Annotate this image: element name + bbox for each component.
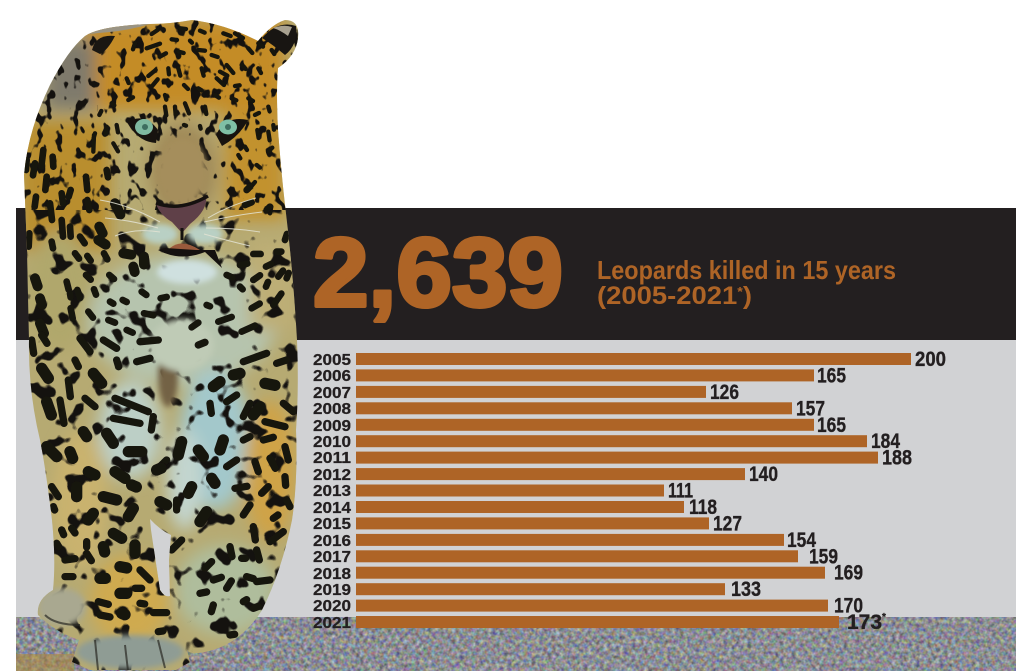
- row 2005: 200: [915, 348, 946, 371]
- row 2017: [313, 545, 838, 568]
- heading text: ): [743, 282, 752, 310]
- row 2014: 118: [689, 496, 717, 519]
- paw toes: [45, 615, 165, 671]
- row 2008: 157: [796, 397, 825, 420]
- heading text: *: [737, 284, 744, 299]
- row 2006: [313, 364, 846, 387]
- row 2020: 2020: [313, 598, 351, 615]
- leopard spots: chest and legs: [32, 335, 293, 635]
- row 2018: 2018: [313, 566, 351, 583]
- row 2008: 2008: [313, 401, 351, 418]
- row 2017: 2017: [313, 549, 351, 566]
- row 2021: [313, 611, 886, 634]
- leopard coat colours: [15, 15, 305, 671]
- row 2019: 133: [731, 578, 761, 601]
- unspotted face, chest and paw fur: [38, 138, 223, 669]
- row 2011: [313, 447, 912, 470]
- row 2020: 170: [834, 595, 863, 618]
- whiskers: [100, 198, 262, 246]
- row 2006: 2006: [313, 368, 351, 385]
- row 2009: 2009: [313, 418, 351, 435]
- row 2013: 111: [668, 480, 693, 502]
- row 2005: [313, 348, 946, 371]
- row 2017: 159: [809, 545, 838, 568]
- row 2014: 2014: [313, 500, 351, 517]
- row 2019: 2019: [313, 582, 351, 599]
- row 2018: [313, 562, 863, 585]
- heading text: (2005-2021: [597, 282, 725, 310]
- row 2016: [313, 529, 816, 552]
- row 2007: 126: [710, 381, 739, 404]
- row 2016: 154: [787, 529, 816, 552]
- panel: dark header band: [16, 208, 1016, 340]
- row 2014: [313, 496, 717, 519]
- row 2021: *: [882, 612, 886, 623]
- fur spot texture: [15, 15, 305, 671]
- heading text: Leopards killed in 15 years: [597, 255, 896, 285]
- row 2012: 2012: [313, 467, 351, 484]
- panel: grey chart background: [16, 340, 1016, 617]
- eyes: [127, 118, 248, 146]
- leopard spots: head and shoulders: [26, 28, 289, 333]
- row 2009: [313, 414, 846, 437]
- row 2010: 184: [871, 430, 900, 453]
- illustration: leopard walking toward viewer: [15, 15, 305, 671]
- row 2020: [313, 595, 863, 618]
- row 2011: 188: [882, 447, 912, 470]
- row 2015: 2015: [313, 516, 351, 533]
- row 2007: 2007: [313, 385, 351, 402]
- row 2013: 2013: [313, 483, 351, 500]
- row 2021: 173: [847, 611, 882, 634]
- bar chart: leopards killed per year: [313, 348, 946, 634]
- row 2012: [313, 463, 778, 486]
- nose and muzzle: [156, 196, 222, 268]
- ear markings: [88, 24, 296, 55]
- row 2021: 2021: [313, 615, 351, 632]
- row 2012: 140: [749, 463, 778, 486]
- big number: 2,639: [313, 218, 563, 327]
- row 2009: 165: [817, 414, 846, 437]
- row 2016: 2016: [313, 533, 351, 550]
- row 2008: [313, 397, 825, 420]
- row 2007: [313, 381, 739, 404]
- row 2015: 127: [713, 512, 742, 535]
- row 2005: 2005: [313, 352, 351, 369]
- row 2018: 169: [834, 562, 863, 585]
- row 2015: [313, 512, 742, 535]
- row 2019: [313, 578, 761, 601]
- row 2011: 2011: [313, 450, 351, 467]
- row 2010: 2010: [313, 434, 351, 451]
- row 2013: [313, 480, 693, 502]
- ground: gravel texture: [16, 617, 1016, 671]
- row 2010: [313, 430, 900, 453]
- row 2006: 165: [817, 364, 846, 387]
- heading text: [597, 255, 896, 310]
